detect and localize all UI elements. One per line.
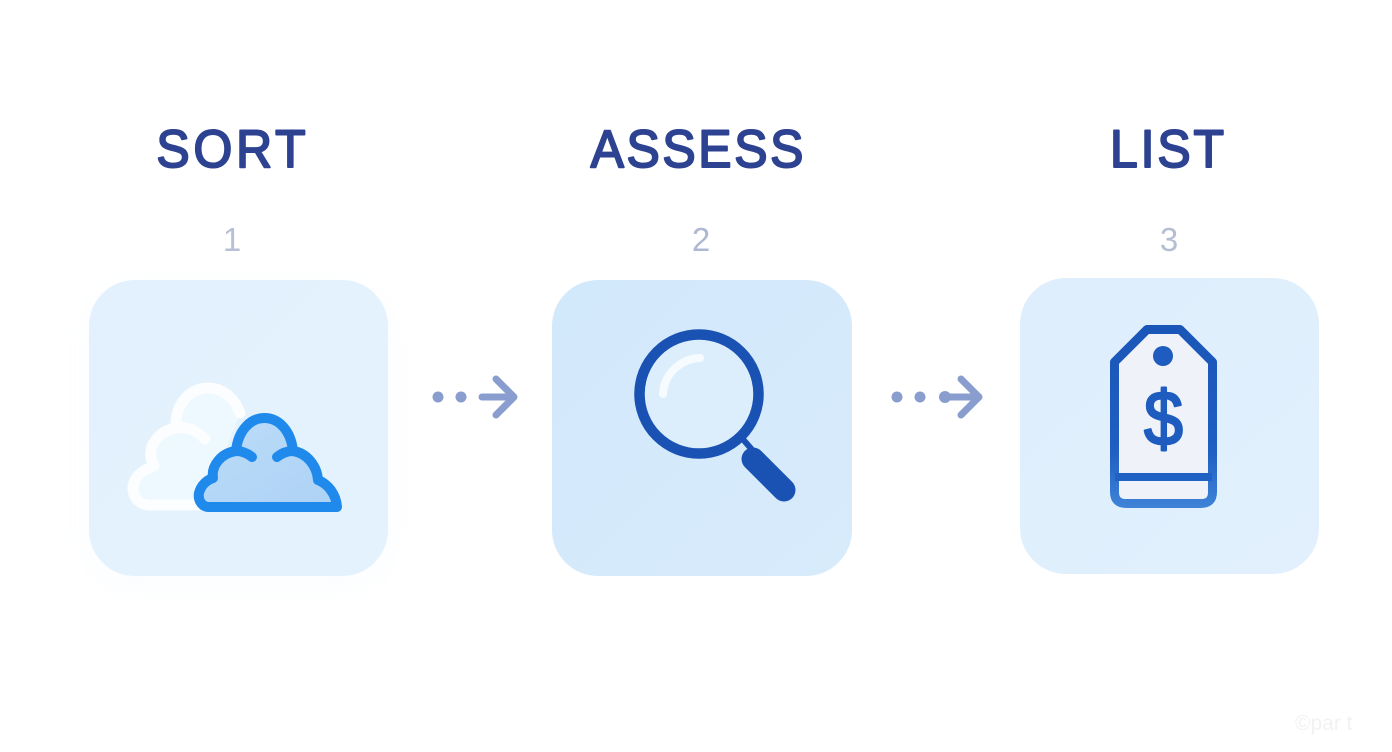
step number 3: 3 xyxy=(1160,221,1178,258)
icon: clouds xyxy=(133,388,337,507)
heading: SORT: SORT xyxy=(156,120,306,178)
icon: magnifying glass xyxy=(640,334,784,490)
icon: white cloud xyxy=(133,388,240,505)
dollar sign: $ xyxy=(1144,375,1183,462)
heading: ASSESS: ASSESS xyxy=(591,120,803,178)
icon: blue cloud xyxy=(199,418,337,507)
arrow: assess to list xyxy=(892,379,979,415)
step number 1: 1 xyxy=(223,221,241,258)
icon: price tag xyxy=(1114,330,1212,504)
heading: LIST: LIST xyxy=(1110,120,1224,178)
step number 2: 2 xyxy=(692,221,710,258)
watermark: ©par t xyxy=(1295,712,1353,735)
panel: sort xyxy=(85,280,392,588)
arrow: sort to assess xyxy=(432,379,514,415)
panel: assess xyxy=(552,280,852,576)
panel: list xyxy=(1020,278,1319,574)
